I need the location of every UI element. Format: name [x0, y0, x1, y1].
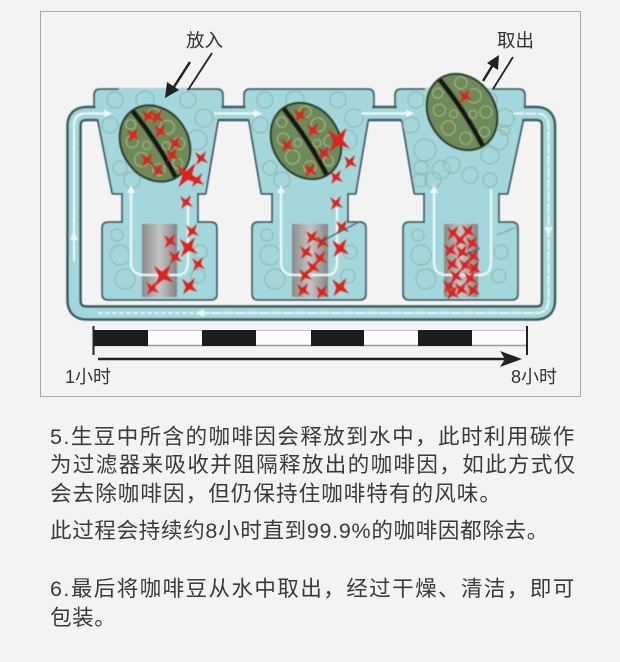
caffeine markers	[127, 89, 481, 300]
flow arrowheads	[70, 110, 552, 317]
label: 8 hours: 8小时	[511, 367, 557, 387]
paragraph: step 6: 6.最后将咖啡豆从水中取出，经过干燥、清洁，即可	[50, 577, 576, 601]
arrow: take out	[483, 55, 513, 89]
pipe network with three vessels	[74, 88, 548, 313]
bubbles	[102, 91, 514, 289]
label: take out: 取出	[497, 30, 534, 51]
body text	[50, 425, 577, 630]
flow lines	[74, 114, 548, 313]
paragraph: step 5	[50, 425, 577, 506]
label: put in: 放入	[186, 30, 223, 51]
paragraph: step 6	[50, 577, 576, 630]
bean 2	[257, 89, 355, 193]
filter pointer lines	[320, 223, 517, 255]
diagram panel: decaffeination process	[40, 11, 581, 397]
panel frame	[40, 12, 580, 396]
paragraph: step 5: 为过滤器来吸收并阻隔释放出的咖啡因，如此方式仅	[50, 453, 577, 477]
paragraph: step 5: 5.生豆中所含的咖啡因会释放到水中，此时利用碳作	[50, 425, 576, 449]
label: 1 hour: 1小时	[65, 367, 111, 387]
timeline bar	[93, 326, 527, 355]
paragraph: duration: 此过程会持续约8小时直到99.9%的咖啡因都除去。	[50, 519, 549, 543]
paragraph: step 5: 会去除咖啡因，但仍保持住咖啡特有的风味。	[50, 482, 502, 506]
bean 1	[106, 92, 204, 195]
paragraph: step 6: 包装。	[50, 606, 116, 630]
bean 3	[413, 60, 511, 164]
filter cylinders	[142, 224, 478, 297]
arrow: put in	[165, 53, 212, 98]
timeline arrow	[98, 351, 522, 367]
